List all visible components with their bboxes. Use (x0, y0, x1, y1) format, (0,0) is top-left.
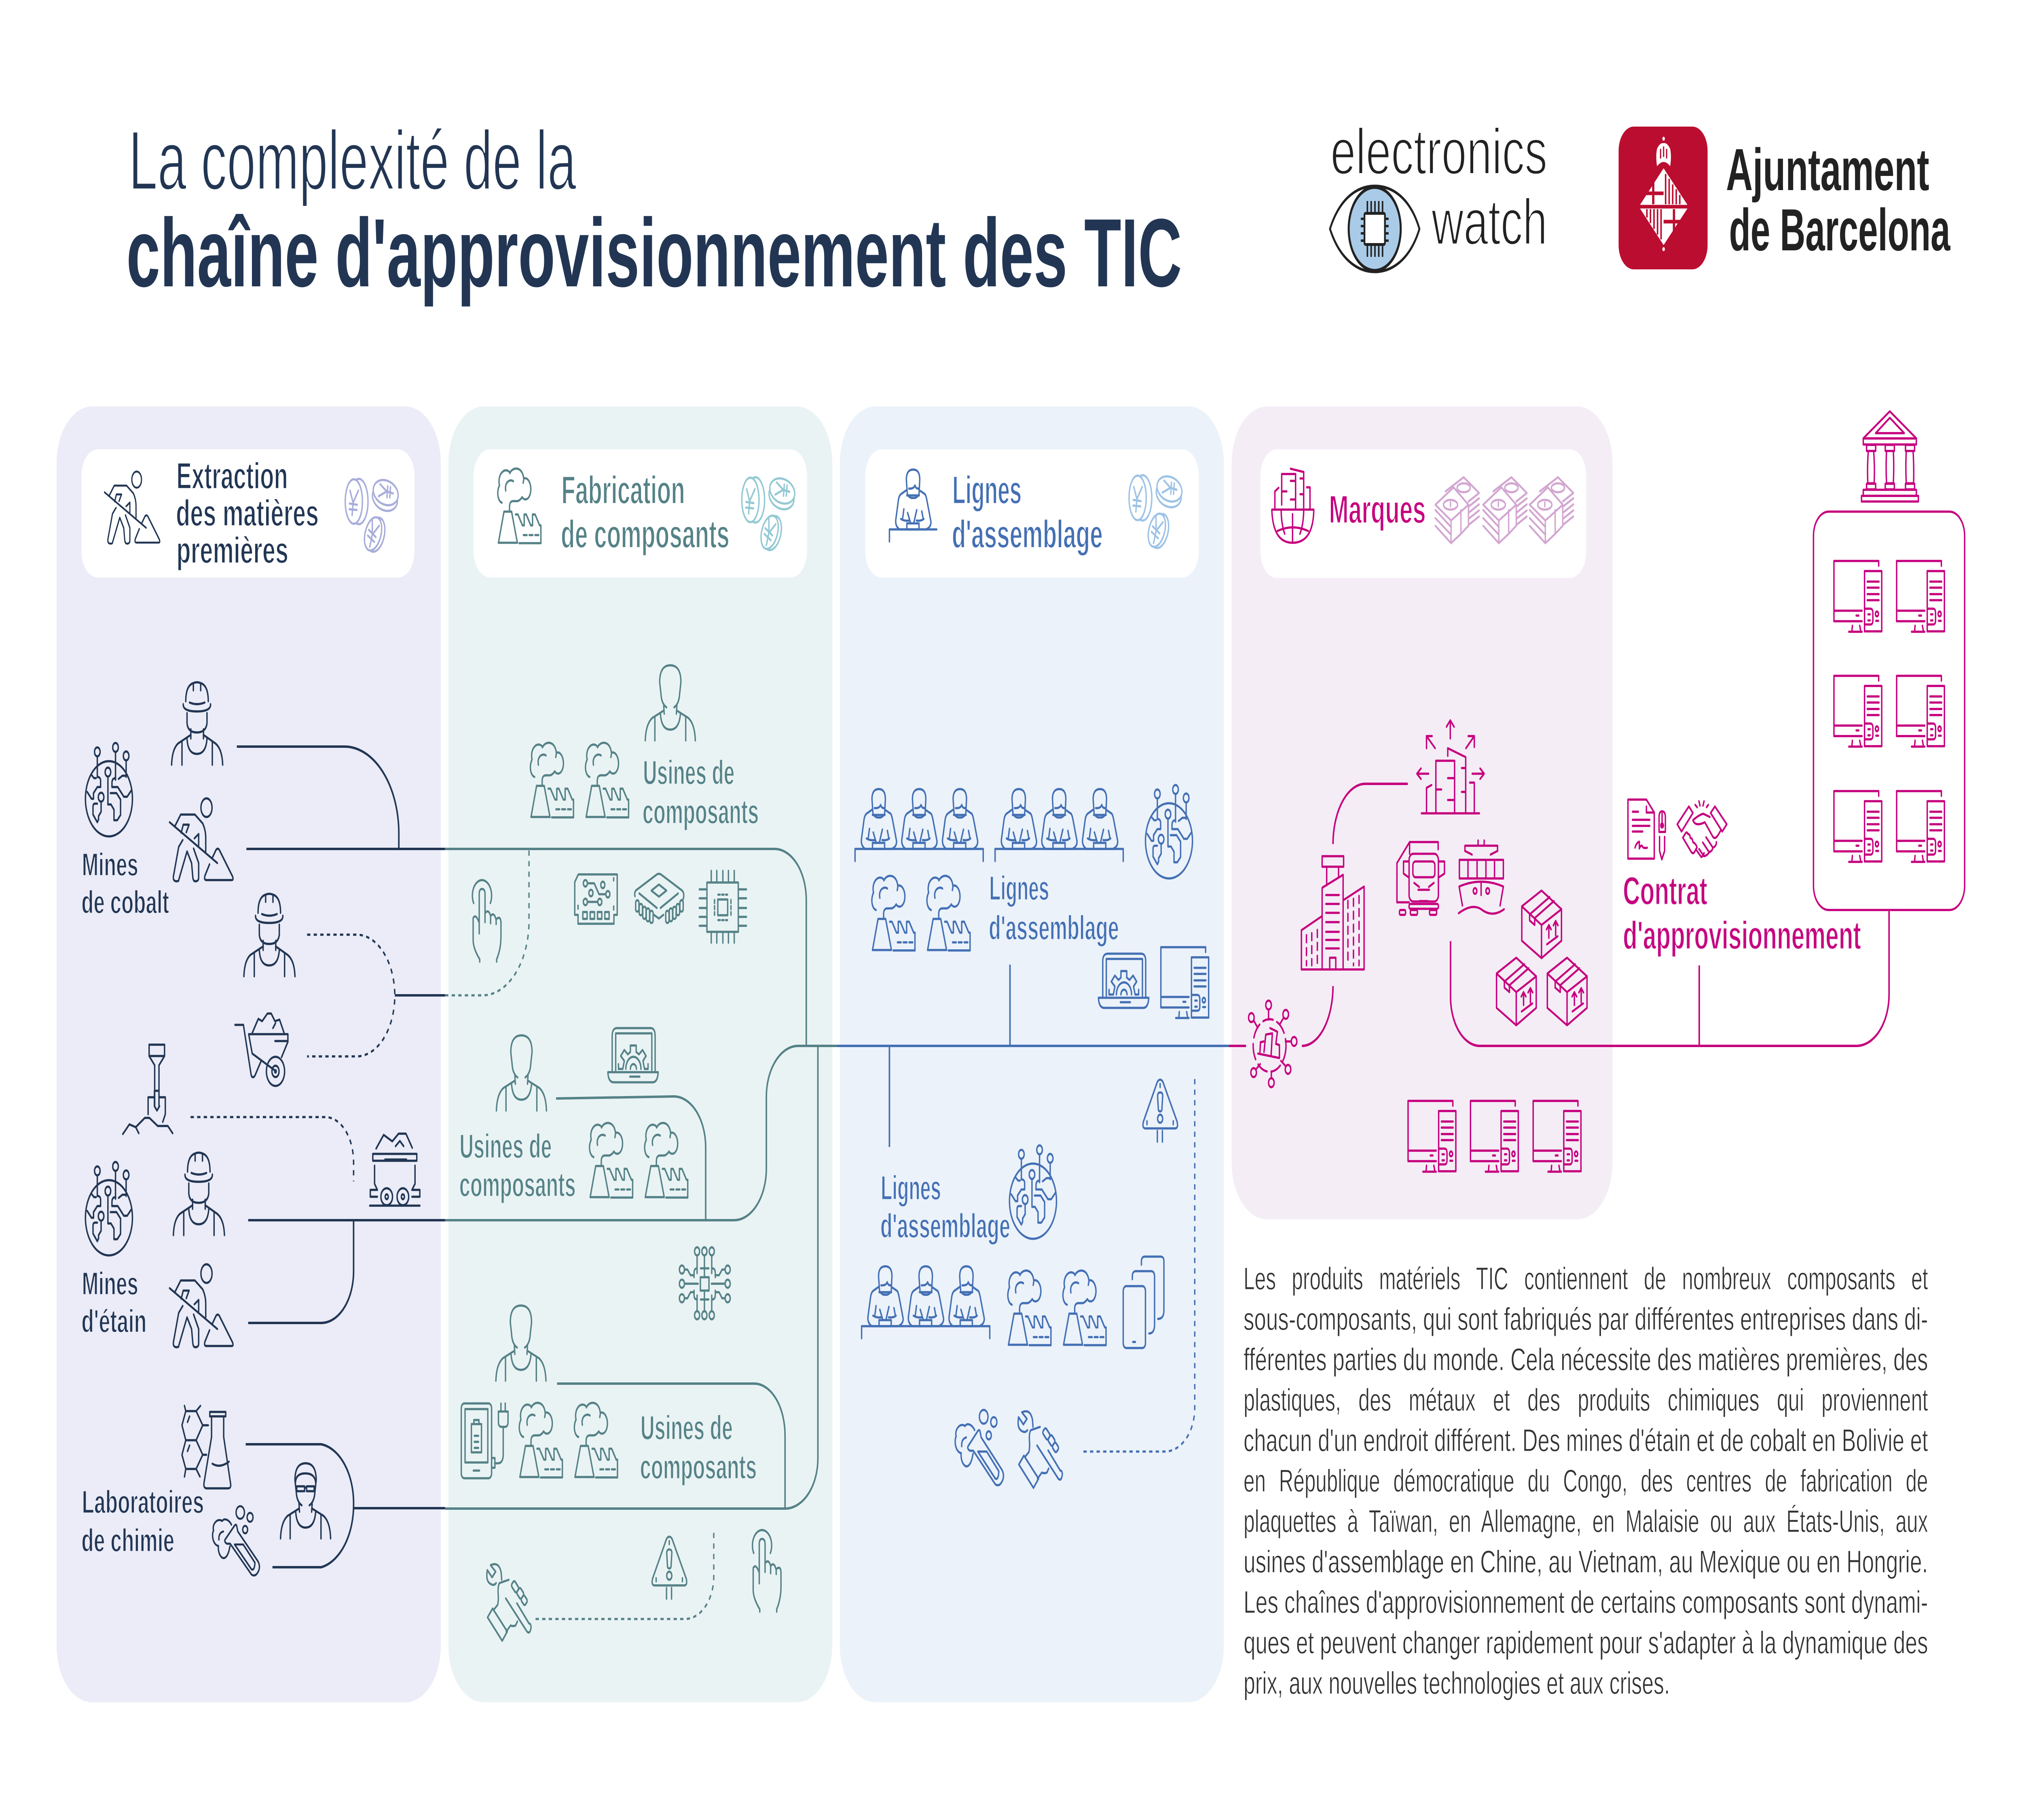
heading: extraction: des matières (176, 493, 319, 534)
logo: electronics watch (1330, 116, 1547, 272)
icon: digging worker (169, 798, 233, 881)
heading: extraction: premières (176, 530, 288, 571)
icon: worker 2 (497, 1035, 546, 1111)
label: contrat d'approvisionnement: Contrat (1623, 870, 1707, 913)
icon: factory (531, 743, 573, 817)
label: lignes d'assemblage 2: Lignes (881, 1169, 941, 1207)
label: usines de composants 1: composants (643, 793, 759, 831)
text block: description: sous-composants, qui sont fabriqués par différentes entreprises dans di- (1244, 1301, 1928, 1337)
logo: electronics watch: watch (1431, 186, 1547, 258)
connectors: raw materials lines (190, 747, 445, 1567)
text block: description (1244, 1261, 1928, 1701)
heading: marques: Marques (1329, 488, 1426, 532)
label: usines de composants 1: Usines de (643, 753, 734, 791)
icon: factory (872, 876, 915, 950)
icon: desktop computer (1161, 947, 1209, 1018)
label: usines de composants 2 (459, 1127, 576, 1204)
icon: company network (1249, 1001, 1297, 1087)
heading: lignes d'assemblage: d'assemblage (952, 513, 1103, 557)
panel: fabrication de composants (445, 406, 837, 1702)
text block: description: Les chaînes d'approvisionnement de certains composants sont dynami- (1244, 1584, 1928, 1620)
icon: computer (1470, 1101, 1518, 1172)
icon: circuit board (575, 874, 617, 924)
label: lignes d'assemblage 1: Lignes (989, 869, 1049, 907)
text block: description: chacun d'un endroit différent. Des mines d'étain et de cobalt en Bolivie et (1244, 1422, 1928, 1458)
label: lignes d'assemblage 1: d'assemblage (989, 909, 1119, 947)
icon: miner with helmet 3 (173, 1153, 224, 1235)
label: usines de composants 3 (640, 1409, 757, 1486)
icon: handshake (1677, 801, 1727, 857)
logo: Ajuntament de Barcelona: Ajuntament (1726, 136, 1929, 203)
icon: assembly workers row 3 (862, 1266, 990, 1338)
heading: lignes d'assemblage: Lignes (952, 469, 1022, 512)
panel: marques (1229, 406, 1889, 1219)
icon: parcel (1522, 891, 1561, 958)
text block: description: usines d'assemblage en Chine, au Vietnam, au Mexique ou en Hongrie. (1244, 1544, 1928, 1579)
heading: fabrication de composants: de composants (561, 513, 730, 557)
icon: cargo ship (1459, 840, 1504, 914)
label: lignes d'assemblage 2 (880, 1169, 1010, 1245)
public buyer: procurement contract and institution (1623, 411, 1965, 958)
icon: wrench in hand (1018, 1411, 1062, 1488)
text block: description: ques et peuvent changer rapidement pour s'adapter à la dynamique des (1244, 1625, 1928, 1660)
icon: processor (699, 871, 747, 943)
label: mines de cobalt: Mines (82, 847, 138, 883)
logo: Ajuntament de Barcelona (1618, 127, 1950, 269)
box: computers in use (1813, 512, 1965, 910)
label: laboratoires de chimie: de chimie (81, 1523, 174, 1559)
icon: touch hand 2 (753, 1530, 781, 1612)
logo: Ajuntament de Barcelona: de Barcelona (1729, 197, 1950, 263)
panel: lignes d'assemblage (837, 406, 1229, 1702)
icon: chemist (281, 1463, 331, 1539)
heading: lignes d'assemblage (865, 449, 1199, 578)
icon: parcel (1497, 958, 1536, 1025)
icon: factory (645, 1123, 688, 1198)
panel: extraction des matières premières (57, 406, 445, 1702)
icon: test tube (955, 1410, 1003, 1485)
icon: computer (1533, 1101, 1581, 1172)
icon: worker (645, 665, 695, 741)
label: usines de composants 2: Usines de (459, 1127, 552, 1165)
label: lignes d'assemblage 2: d'assemblage (880, 1207, 1010, 1245)
icon: contract (1628, 800, 1665, 859)
icon: test tube (213, 1506, 260, 1575)
text block: description: plaquettes à Taïwan, en Allemagne, en Malaisie ou aux États-Unis, aux (1244, 1503, 1928, 1539)
icon: globe 2 (1009, 1145, 1056, 1239)
icon: factory (574, 1403, 618, 1477)
icon: globe cobalt (85, 743, 133, 836)
icon: miner with helmet 2 (244, 894, 295, 976)
icon: factory (927, 876, 970, 950)
text block: description: prix, aux nouvelles technologies et aux crises. (1244, 1665, 1670, 1701)
heading: fabrication de composants: Fabrication (561, 469, 685, 512)
icon: distribution building (1417, 720, 1484, 813)
title: La complexité de la (129, 114, 576, 207)
title: chaîne d'approvisionnement des TIC (126, 199, 1182, 307)
icon: assembly workers row 2 (995, 789, 1123, 861)
title (126, 114, 1182, 307)
icon: chip in hands (635, 874, 684, 923)
logo: electronics watch: electronics (1330, 116, 1547, 188)
icon: laptop (1098, 954, 1149, 1008)
label: contrat d'approvisionnement: d'approvisionnement (1623, 914, 1861, 958)
label: mines d'étain: Mines (82, 1266, 138, 1302)
label: mines d'étain (81, 1266, 147, 1340)
text block: description: en République démocratique du Congo, des centres de fabrication de (1244, 1463, 1928, 1498)
label: laboratoires de chimie (81, 1484, 204, 1559)
icon: parcel (1547, 958, 1587, 1025)
heading: extraction: Extraction (176, 455, 288, 497)
icon: warning sign (1143, 1080, 1178, 1142)
icon: factory (1063, 1271, 1106, 1345)
icon: circuit chip (679, 1247, 730, 1319)
icon: computer (1408, 1101, 1456, 1172)
icon: phones (1123, 1257, 1164, 1348)
label: usines de composants 3: Usines de (641, 1409, 733, 1447)
label: usines de composants 1 (643, 753, 759, 831)
icon: mine cart (370, 1134, 420, 1206)
connectors: assembly lines (837, 965, 1229, 1452)
connectors: component lines (445, 849, 837, 1619)
label: usines de composants 2: composants (459, 1166, 576, 1204)
icon: hexagons and flask (182, 1406, 231, 1488)
icon: factory (1008, 1271, 1051, 1345)
icon: wrench in hand (487, 1564, 531, 1641)
icon: warning sign (652, 1537, 687, 1599)
icon: factory (590, 1123, 632, 1198)
heading: marques (1261, 449, 1586, 578)
icon: worker 3 (496, 1306, 546, 1381)
icon: laptop (608, 1028, 658, 1082)
heading: extraction (81, 449, 415, 578)
label: contrat d'approvisionnement (1623, 870, 1861, 958)
icon: factory building (1301, 856, 1364, 969)
label: usines de composants 3: composants (640, 1448, 757, 1486)
icon: globe tin (85, 1162, 133, 1255)
label: mines d'étain: d'étain (81, 1304, 147, 1340)
text block: description: plastiques, des métaux et des produits chimiques qui proviennent (1244, 1382, 1928, 1418)
icon: assembly workers row 1 (855, 789, 983, 861)
icon: digging worker 2 (169, 1264, 233, 1347)
heading: fabrication de composants (474, 449, 807, 578)
icon: factory (586, 743, 628, 817)
label: mines de cobalt: de cobalt (81, 885, 169, 921)
icon: globe (1145, 785, 1193, 878)
icon: public institution (1861, 411, 1918, 502)
text block: description: Les produits matériels TIC contiennent de nombreux composants et (1244, 1261, 1928, 1296)
icon: wheelbarrow (235, 1014, 288, 1086)
icon: touch hand (472, 880, 501, 962)
label: lignes d'assemblage 1 (989, 869, 1119, 947)
text block: description: fférentes parties du monde. Cela nécessite des matières premières, des (1244, 1342, 1928, 1377)
label: laboratoires de chimie: Laboratoires (82, 1484, 204, 1520)
label: mines de cobalt (81, 847, 169, 921)
icon: factory (519, 1403, 563, 1477)
icon: tablet and plug (461, 1403, 508, 1478)
icon: shovel (123, 1045, 173, 1134)
icon: miner with helmet (171, 682, 223, 765)
icon: truck (1397, 842, 1445, 915)
connectors: brand lines (1229, 784, 1889, 1046)
